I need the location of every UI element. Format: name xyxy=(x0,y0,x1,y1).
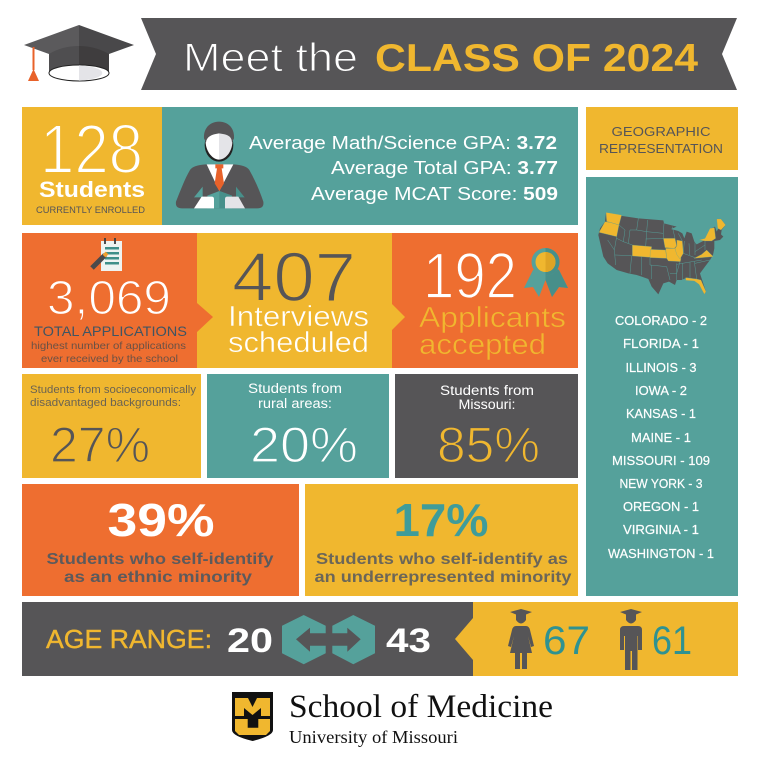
panel: states list: NEW YORK - 3 xyxy=(620,477,703,491)
map: United States xyxy=(598,212,726,294)
panel: accepted applicants: accepted xyxy=(419,329,546,361)
logo: University of Missouri School of Medicine: School of Medicine xyxy=(289,689,553,725)
panel: rural students xyxy=(207,374,389,478)
panel: interviews scheduled xyxy=(197,233,405,368)
panel: academic averages: Average Math/Science GPA: 3.72 xyxy=(249,132,557,153)
panel: age range: 43 xyxy=(386,622,431,660)
logo: University of Missouri School of Medicine: University of Missouri xyxy=(289,727,458,747)
panel: Missouri students xyxy=(395,374,578,478)
icon: MU shield xyxy=(232,692,273,741)
panel: age range: 20 xyxy=(227,622,273,660)
panel: rural students: Students from xyxy=(248,381,342,396)
panel: socioeconomically disadvantaged: disadvantaged backgrounds: xyxy=(30,397,181,409)
icon: student in suit xyxy=(176,122,263,208)
panel: accepted applicants: 192 xyxy=(423,239,517,312)
panel: interviews scheduled: 407 xyxy=(232,238,356,316)
panel: interviews scheduled: scheduled xyxy=(228,327,369,359)
panel: states list: WASHINGTON - 1 xyxy=(608,547,714,561)
panel: states list xyxy=(586,177,738,596)
panel: socioeconomically disadvantaged: 27% xyxy=(50,417,150,473)
panel: enrolled students: 128 xyxy=(40,110,143,188)
panel: rural students: rural areas: xyxy=(258,396,332,411)
panel: geographic heading: REPRESENTATION xyxy=(599,141,723,156)
panel: states list: KANSAS - 1 xyxy=(626,407,696,421)
icon: female graduate xyxy=(508,609,534,669)
panel: total applications xyxy=(22,233,213,368)
icon: graduation cap xyxy=(24,25,134,81)
panel: Missouri students: Missouri: xyxy=(458,397,516,412)
panel: academic averages: Average MCAT Score: 509 xyxy=(311,183,558,204)
panel: total applications: TOTAL APPLICATIONS xyxy=(34,323,187,339)
panel: states list: MISSOURI - 109 xyxy=(612,454,710,468)
panel: Missouri students: Students from xyxy=(440,383,534,398)
panel: ethnic minority: 39% xyxy=(108,494,214,546)
panel: states list: OREGON - 1 xyxy=(623,500,699,514)
panel: Missouri students: 85% xyxy=(437,417,540,473)
icon: clipboard xyxy=(92,238,122,271)
panel: underrepresented minority xyxy=(305,484,578,596)
panel: gender counts: 67 xyxy=(543,619,590,663)
panel: enrolled students xyxy=(22,107,162,225)
panel: gender counts: 61 xyxy=(652,619,692,663)
title banner xyxy=(141,18,737,90)
icon: male graduate xyxy=(620,609,642,670)
panel: age range xyxy=(22,602,474,676)
panel: enrolled students: CURRENTLY ENROLLED xyxy=(36,205,146,215)
panel: academic averages: Average Total GPA: 3.77 xyxy=(331,157,558,178)
icon: range arrows xyxy=(282,615,375,664)
panel: ethnic minority: Students who self-identify xyxy=(46,551,274,568)
panel: accepted applicants xyxy=(392,233,578,368)
panel: states list: COLORADO - 2 xyxy=(615,314,707,328)
panel: underrepresented minority: an underrepresented minority xyxy=(314,569,572,586)
panel: states list: IOWA - 2 xyxy=(635,384,687,398)
title: Meet the: Meet the xyxy=(183,36,358,80)
panel: total applications: highest number of applications xyxy=(31,340,186,352)
panel: states list: MAINE - 1 xyxy=(631,431,691,445)
panel: states list: VIRGINIA - 1 xyxy=(623,523,699,537)
panel: academic averages xyxy=(162,107,578,225)
panel: interviews scheduled: Interviews xyxy=(228,301,369,333)
panel: socioeconomically disadvantaged: Students from socioeconomically xyxy=(30,384,197,396)
icon: ribbon xyxy=(524,248,568,297)
panel: total applications: 3,069 xyxy=(47,272,171,325)
panel: states list: FLORIDA - 1 xyxy=(623,337,699,351)
panel: age range: AGE RANGE: xyxy=(46,624,212,654)
title: Class of 2024: CLASS OF 2024 xyxy=(375,37,698,80)
panel: geographic heading xyxy=(586,107,738,170)
panel: underrepresented minority: Students who self-identify as xyxy=(316,551,568,568)
panel: ethnic minority xyxy=(22,484,299,596)
panel: accepted applicants: Applicants xyxy=(419,302,566,334)
panel: socioeconomically disadvantaged xyxy=(22,374,201,478)
panel: ethnic minority: as an ethnic minority xyxy=(64,569,252,586)
panel: rural students: 20% xyxy=(250,417,358,473)
logo: University of Missouri School of Medicine xyxy=(232,689,553,747)
panel: gender counts xyxy=(455,602,738,676)
panel: underrepresented minority: 17% xyxy=(394,494,488,546)
panel: states list: ILLINOIS - 3 xyxy=(626,361,697,375)
panel: geographic heading: GEOGRAPHIC xyxy=(612,124,710,139)
panel: total applications: ever received by the school xyxy=(41,353,178,365)
panel: enrolled students: Students xyxy=(39,177,145,202)
